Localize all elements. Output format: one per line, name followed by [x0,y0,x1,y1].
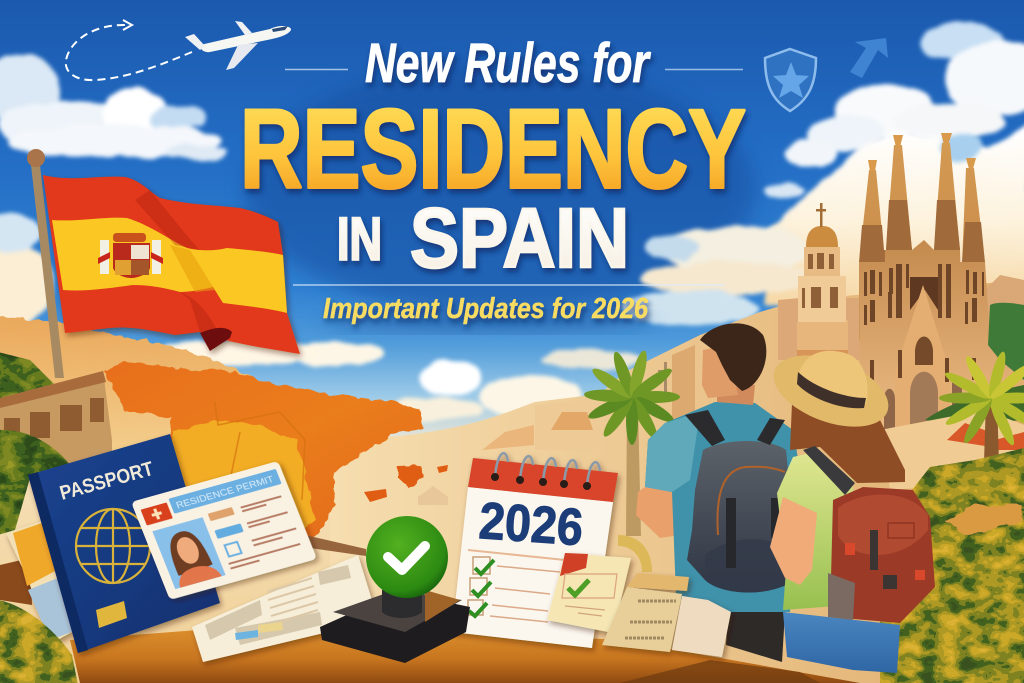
stamp base [320,592,470,663]
terracotta roof right [995,432,1024,450]
brown stick behind paper [305,535,366,556]
bush: behind palm [925,385,1024,425]
table shadow [620,660,820,683]
tower openings [864,264,984,382]
orange roof [551,412,593,430]
lower wing [226,43,258,70]
crown [113,233,146,242]
distant building left [0,371,112,470]
approval stamp [320,516,470,663]
cloud: mid right [620,226,820,326]
lamp post [658,362,672,402]
checkmarks [469,560,494,616]
checklist boxes [468,557,490,615]
cockpit [272,26,288,32]
card checkbox [225,542,242,557]
cross [816,203,826,227]
blue bar [235,630,258,640]
cloud: upper right [763,23,1024,197]
map yellow interior [150,420,315,545]
photo box [152,517,226,589]
arms quarter [131,245,149,259]
brochure [6,520,72,643]
parcel and cards [602,573,731,657]
hills left [0,318,340,470]
woman [764,341,935,673]
coat of arms [98,233,163,278]
cloud: left horizon [0,212,54,327]
card field: blue [214,523,244,539]
centre gable [895,285,950,430]
card plus [150,508,164,520]
back wall [884,250,962,340]
church tower [797,203,848,366]
stamp neck [382,590,422,618]
man backpack [685,410,791,592]
card header band [168,469,282,514]
yellow bar [258,622,283,633]
village in the sand [418,345,695,505]
spire tips [868,133,976,171]
island: Ibiza [364,489,387,502]
cloud: lower centre [160,338,640,422]
woman backpack [828,487,935,623]
man legs [726,610,785,662]
card flag [141,502,173,526]
parcel lines [625,601,676,638]
red tabs [845,543,925,580]
brochure cover [13,522,57,586]
backpack lower panel [705,539,790,592]
gold ring behind man [618,535,652,572]
parcel card [672,596,731,657]
cloud: upper left [0,54,225,161]
side pocket [828,573,855,620]
buckle [870,530,897,589]
table plank left [0,558,32,605]
subtitle: Important Updates for 2026 [323,293,649,325]
tower drum [804,247,840,276]
terracotta roof [947,423,990,446]
residence permit card [131,461,317,600]
bush: left behind building [0,352,55,400]
pole ball [27,149,45,167]
stamp top warm corner [425,590,460,622]
island: Mallorca [398,465,423,488]
arrow head [123,20,132,30]
paper lines [268,578,318,624]
tower middle [798,276,846,322]
man arm [636,487,686,538]
side arches [884,377,962,430]
tower base band [797,350,848,366]
zipper [717,467,785,535]
stamp ball [366,516,448,598]
card header text: RESIDENCE PERMIT [175,474,276,511]
arms quarter lower [131,260,149,275]
man face [702,345,738,398]
stamp top [333,590,462,632]
man neck [717,380,755,405]
map region lines [215,402,305,500]
windows [802,253,838,308]
pillars [100,240,161,274]
flag roll [200,328,232,351]
checklist frame [468,550,565,560]
pillar ribbons [98,252,163,264]
woman shirt [777,452,853,610]
right wall [672,345,695,420]
note tab [560,553,588,576]
parcel lid [627,573,689,591]
calendar rings [495,453,600,486]
flag fold yellow [170,245,215,292]
upper arch [915,336,933,365]
small house [418,486,448,505]
passport chip [96,601,127,628]
shield icon [765,49,816,111]
cloud: behind cathedral [765,120,1024,305]
buildings right foreground [880,410,1024,490]
Spanish flag [43,175,300,354]
tail [185,34,205,50]
flagpole [27,149,64,378]
man shirt [645,402,800,612]
fuselage [200,26,291,52]
residence paper [192,555,378,662]
Sagrada Familia [859,133,1015,435]
brochure panel [28,578,72,640]
yellow band [52,218,287,313]
title rule left [285,68,348,70]
title: New Rules for: New Rules for [365,31,651,94]
subtitle shadow [325,314,655,330]
bush: left upper [0,430,75,535]
clouds [0,23,1024,422]
palm: centre [584,349,680,536]
paper blocks [205,565,351,645]
hat band [797,372,866,408]
flag fold shadows [135,190,222,340]
backpack flap [838,495,928,555]
woman hat brim [764,341,898,441]
calendar [452,453,618,648]
buckles [726,498,781,568]
fronds [584,349,680,445]
wooden table [70,622,860,683]
shield star [773,62,809,98]
foliage orange patch [945,505,1024,535]
woman shorts [783,612,900,673]
dome [806,226,838,247]
bush: lower left [0,600,78,683]
globe icon [76,509,150,583]
sand hills centre [330,280,1024,683]
fronds [939,350,1024,447]
ring holes [491,473,591,490]
man shirt light [645,412,700,492]
note lines [565,606,605,616]
lower arch [910,372,938,430]
card field: tan [208,507,235,521]
passport [28,434,220,653]
upper wing [235,21,252,35]
portrait shoulders [174,561,222,588]
woman hat crown [798,351,868,404]
shoulder strap [803,446,855,495]
checklist lines [490,566,560,622]
far hills by church [778,298,866,360]
white check [388,546,425,570]
passport spine [28,472,88,653]
faint arrow icon [850,38,888,78]
woman arm [770,497,817,585]
far hills right [985,275,1024,330]
flap label [888,523,914,538]
title: IN: IN [337,206,382,272]
backpack straps [685,410,785,446]
upper dark recess [910,277,938,310]
sloped roof [482,425,534,450]
bush: right background [988,303,1024,380]
subtitle rule [293,284,725,286]
note frame [562,574,617,598]
roof band [0,371,106,408]
facade body [859,240,1015,435]
island: Menorca [437,465,448,473]
calendar header [468,458,618,502]
spire bands [859,200,985,263]
calendar year: 2026 [477,492,585,557]
passport label: PASSPORT [57,458,156,505]
portrait face [173,535,203,566]
title glow [245,65,755,315]
title rule right [665,68,743,70]
title: RESIDENCY: RESIDENCY [240,86,746,212]
sky gap in right cloud [940,134,984,162]
man [636,323,800,662]
portrait hair [163,527,213,576]
palm: right [939,350,1024,462]
woman hair [790,403,905,483]
man hair [700,323,766,391]
arms quarter stripes [115,260,131,275]
card text lines [210,496,304,569]
title: SPAIN: SPAIN [410,191,629,285]
towers [859,143,985,340]
note check [568,580,589,595]
dashed flight path with arrow [66,20,192,80]
bush: right foreground [880,448,1024,683]
Spain map [105,362,448,548]
sticky note [547,553,631,633]
arches [4,398,104,442]
airplane icon [185,21,291,70]
